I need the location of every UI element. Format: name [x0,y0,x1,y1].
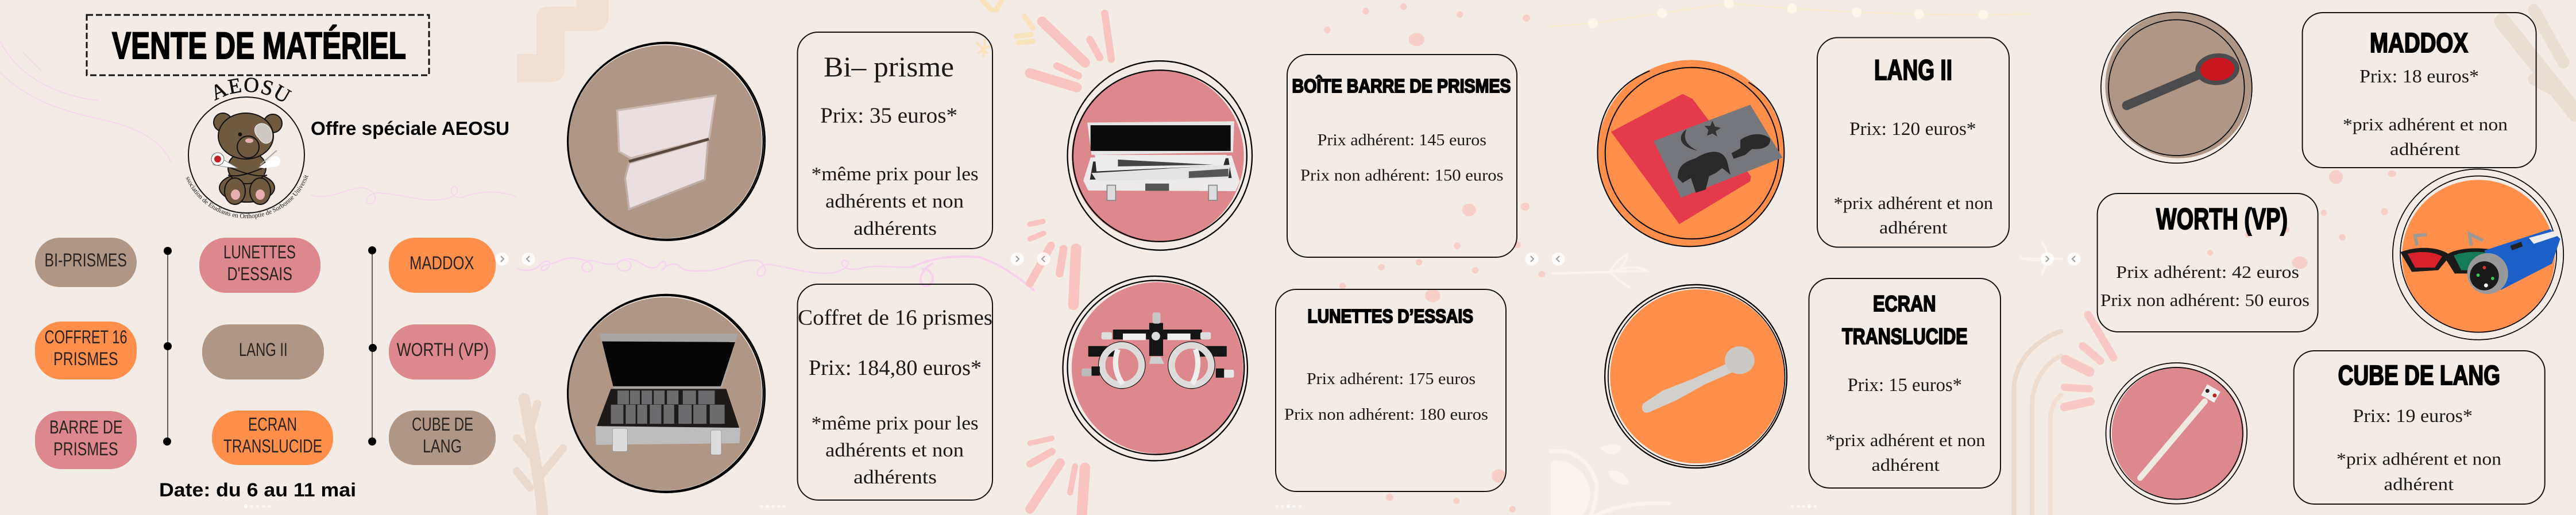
card: cube de lang: Prix: 19 euros* [2353,406,2473,427]
card: lang II: adhérent [1879,217,1948,238]
pill: coffret: COFFRET 16 [45,327,128,347]
logo AEOSU [186,78,308,219]
card: boîte barre de prismes: Prix adhérent: 145 euros [1318,131,1486,149]
card: coffret [797,284,992,500]
card: écran translucide: ECRAN [1873,292,1936,316]
card: maddox: *prix adhérent et non [2343,114,2508,134]
card: coffret: *même prix pour les [812,413,979,434]
card: bi-prisme [797,32,992,249]
card: boîte barre de prismes: BOÎTE BARRE DE PRISMES [1292,75,1511,96]
pill: ecran: ECRAN [248,414,297,435]
list: produits [35,238,496,469]
card: maddox: MADDOX [2370,28,2468,59]
card: coffret: Coffret de 16 prismes [798,305,992,330]
pill: cube: LANG [423,436,462,456]
pill: coffret: PRISMES [53,349,118,369]
pill: bi-prismes [35,238,137,287]
card: lang II: LANG II [1874,54,1952,86]
card: bi-prisme: adhérents [853,218,937,239]
pill: bi-prismes: BI-PRISMES [45,250,127,270]
card: écran translucide: Prix: 15 euros* [1848,375,1962,396]
card: cube de lang: *prix adhérent et non [2336,449,2502,468]
panel: barre et lunettes [1030,3,1545,515]
card: cube de lang: CUBE DE LANG [2338,361,2500,391]
card: bi-prisme: adhérents et non [825,191,964,212]
product: lang II [1598,60,1784,246]
product: cube de lang [2106,363,2247,504]
carousel navigation buttons and dots [244,253,2080,508]
product: lunettes d'essais [1063,276,1248,460]
card: worth: Prix non adhérent: 50 euros [2100,290,2309,310]
card: boîte barre de prismes [1287,55,1517,257]
product: bi-prisme [567,42,765,240]
card: lunettes d'essais: LUNETTES D’ESSAIS [1307,305,1473,327]
card: bi-prisme: *même prix pour les [812,164,979,185]
pill: maddox: MADDOX [410,253,474,273]
card: écran translucide: *prix adhérent et non [1826,430,1986,450]
panel: lang et écran [1551,0,2062,515]
card: coffret: adhérents et non [825,440,964,461]
title [87,15,429,75]
pill: ecran [212,411,333,465]
pill: ecran: TRANSLUCIDE [223,436,322,456]
pill: lang II [202,324,324,380]
pill: maddox [389,238,496,293]
product: écran translucide [1605,285,1787,468]
card: lang II: *prix adhérent et non [1833,193,1994,213]
pill: worth [389,324,496,380]
card: worth [2098,193,2318,332]
card: lang II [1817,38,2009,247]
card: worth: Prix adhérent: 42 euros [2116,262,2299,282]
pill: cube: CUBE DE [412,414,473,435]
card: bi-prisme: Bi– prisme [824,51,954,83]
card: cube de lang [2294,351,2545,504]
card: lang II: Prix: 120 euros* [1849,119,1976,140]
product: boîte barre de prismes [1068,61,1252,250]
text: offre spéciale: Offre spéciale AEOSU [311,118,509,139]
card: lunettes d'essais: Prix adhérent: 175 euros [1307,370,1476,388]
card: lunettes d'essais [1276,289,1506,491]
logo AEOSU: AEOSU [214,78,292,101]
panel: sommaire [0,14,516,501]
product: coffret 16 prismes [567,295,765,493]
panel: maddox worth cube [2064,10,2576,504]
icon: ours [211,113,282,204]
product: maddox [2101,12,2252,163]
title: VENTE DE MATÉRIEL [112,24,406,67]
pill: lang II: LANG II [239,339,288,360]
card: boîte barre de prismes: Prix non adhérent: 150 euros [1300,166,1504,185]
card: lunettes d'essais: Prix non adhérent: 180 euros [1284,405,1488,424]
pill: cube [389,411,496,465]
text: date: Date: du 6 au 11 mai [159,479,356,501]
card: worth: WORTH (VP) [2156,203,2288,236]
card: maddox: Prix: 18 euros* [2359,67,2479,87]
panel: prismes [517,0,1034,515]
pill: barre: BARRE DE [49,417,123,437]
card: écran translucide [1809,278,2000,488]
pill: lunettes [199,238,320,293]
pill: worth: WORTH (VP) [397,339,489,360]
pill: coffret [35,322,137,380]
card: maddox: adhérent [2390,139,2460,159]
pill: lunettes: D'ESSAIS [227,264,292,284]
card: coffret: Prix: 184,80 euros* [809,356,982,380]
card: écran translucide: TRANSLUCIDE [1842,324,1968,349]
card: coffret: adhérents [853,467,937,488]
card: bi-prisme: Prix: 35 euros* [820,103,957,127]
card: écran translucide: adhérent [1871,455,1940,475]
pill: barre [35,411,137,469]
card: cube de lang: adhérent [2384,474,2454,494]
pill: barre: PRISMES [53,439,118,459]
pill: lunettes: LUNETTES [223,242,296,262]
card: maddox [2303,13,2536,168]
product: worth [2393,169,2563,340]
